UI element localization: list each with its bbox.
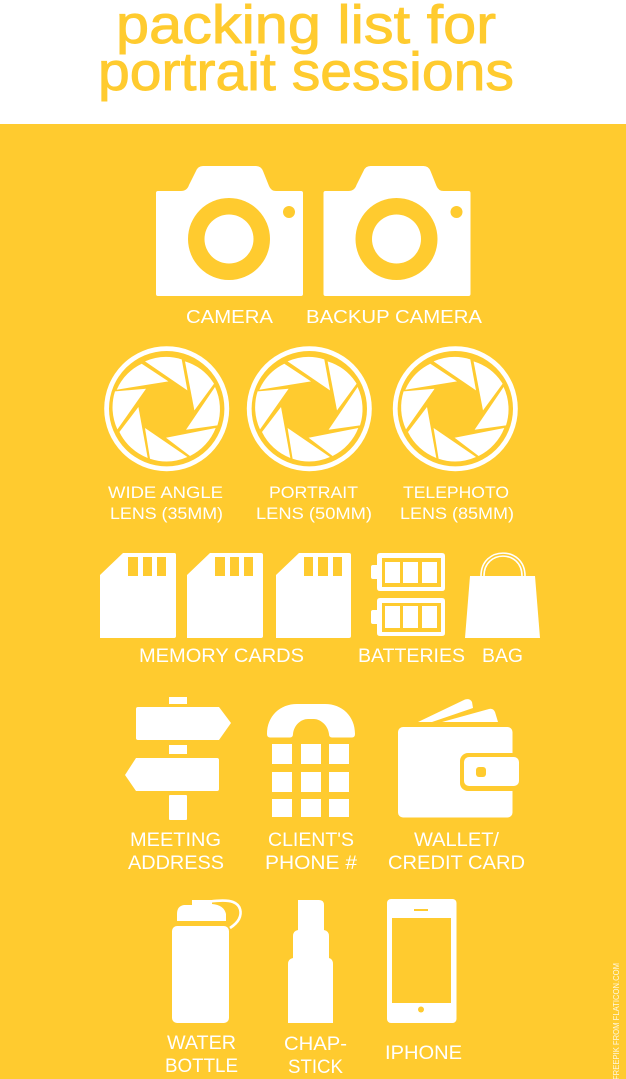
label: telephoto lens: TELEPHOTO xyxy=(403,483,509,502)
label: iphone: IPHONE xyxy=(385,1043,462,1064)
label: chapstick xyxy=(284,1034,347,1078)
icon: batteries xyxy=(371,553,445,636)
icon: bag xyxy=(465,553,540,638)
label: camera: CAMERA xyxy=(186,307,273,327)
icon: wide angle lens xyxy=(104,346,229,471)
label: client's phone xyxy=(265,830,357,874)
label: telephoto lens xyxy=(400,483,514,523)
label: chapstick: CHAP- xyxy=(284,1034,347,1055)
label: water bottle: WATER xyxy=(167,1033,236,1054)
label: wallet / credit card: WALLET/ xyxy=(414,830,500,851)
label: meeting address: MEETING xyxy=(130,830,221,851)
label: wallet / credit card xyxy=(388,830,525,874)
label: portrait lens xyxy=(256,483,372,523)
label: meeting address: ADDRESS xyxy=(128,853,224,874)
icon: backup camera xyxy=(324,166,470,296)
label: chapstick: STICK xyxy=(288,1057,343,1078)
label: portrait lens: LENS (50MM) xyxy=(256,504,372,523)
title xyxy=(98,0,514,102)
icon: wallet xyxy=(398,699,520,818)
label: wide angle lens xyxy=(108,483,223,523)
label: client's phone: PHONE # xyxy=(265,853,357,874)
icon: memory cards xyxy=(100,553,351,638)
label: wallet / credit card: CREDIT CARD xyxy=(388,853,525,874)
label: batteries: BATTERIES xyxy=(358,646,465,667)
label: bag: BAG xyxy=(482,646,523,667)
icon: telephoto lens xyxy=(393,346,518,471)
label: memory cards: MEMORY CARDS xyxy=(139,646,304,667)
icon: signpost xyxy=(125,697,231,820)
label: client's phone: CLIENT'S xyxy=(268,830,354,851)
icon: iphone xyxy=(387,899,456,1023)
label: backup camera: BACKUP CAMERA xyxy=(306,307,482,327)
label: telephoto lens: LENS (85MM) xyxy=(400,504,514,523)
label: water bottle: BOTTLE xyxy=(165,1056,238,1077)
icon: chapstick xyxy=(288,900,333,1023)
credit: FREEPIK FROM FLATICON.COM xyxy=(612,963,621,1079)
title: portrait sessions xyxy=(98,42,514,102)
icon: camera xyxy=(156,166,303,296)
label: portrait lens: PORTRAIT xyxy=(269,483,358,502)
icon: water bottle xyxy=(172,900,241,1023)
label: meeting address xyxy=(128,830,224,874)
icon: phone xyxy=(267,704,355,817)
label: wide angle lens: WIDE ANGLE xyxy=(108,483,223,502)
icon: portrait lens xyxy=(247,346,372,471)
label: water bottle xyxy=(165,1033,238,1077)
label: wide angle lens: LENS (35MM) xyxy=(110,504,223,523)
